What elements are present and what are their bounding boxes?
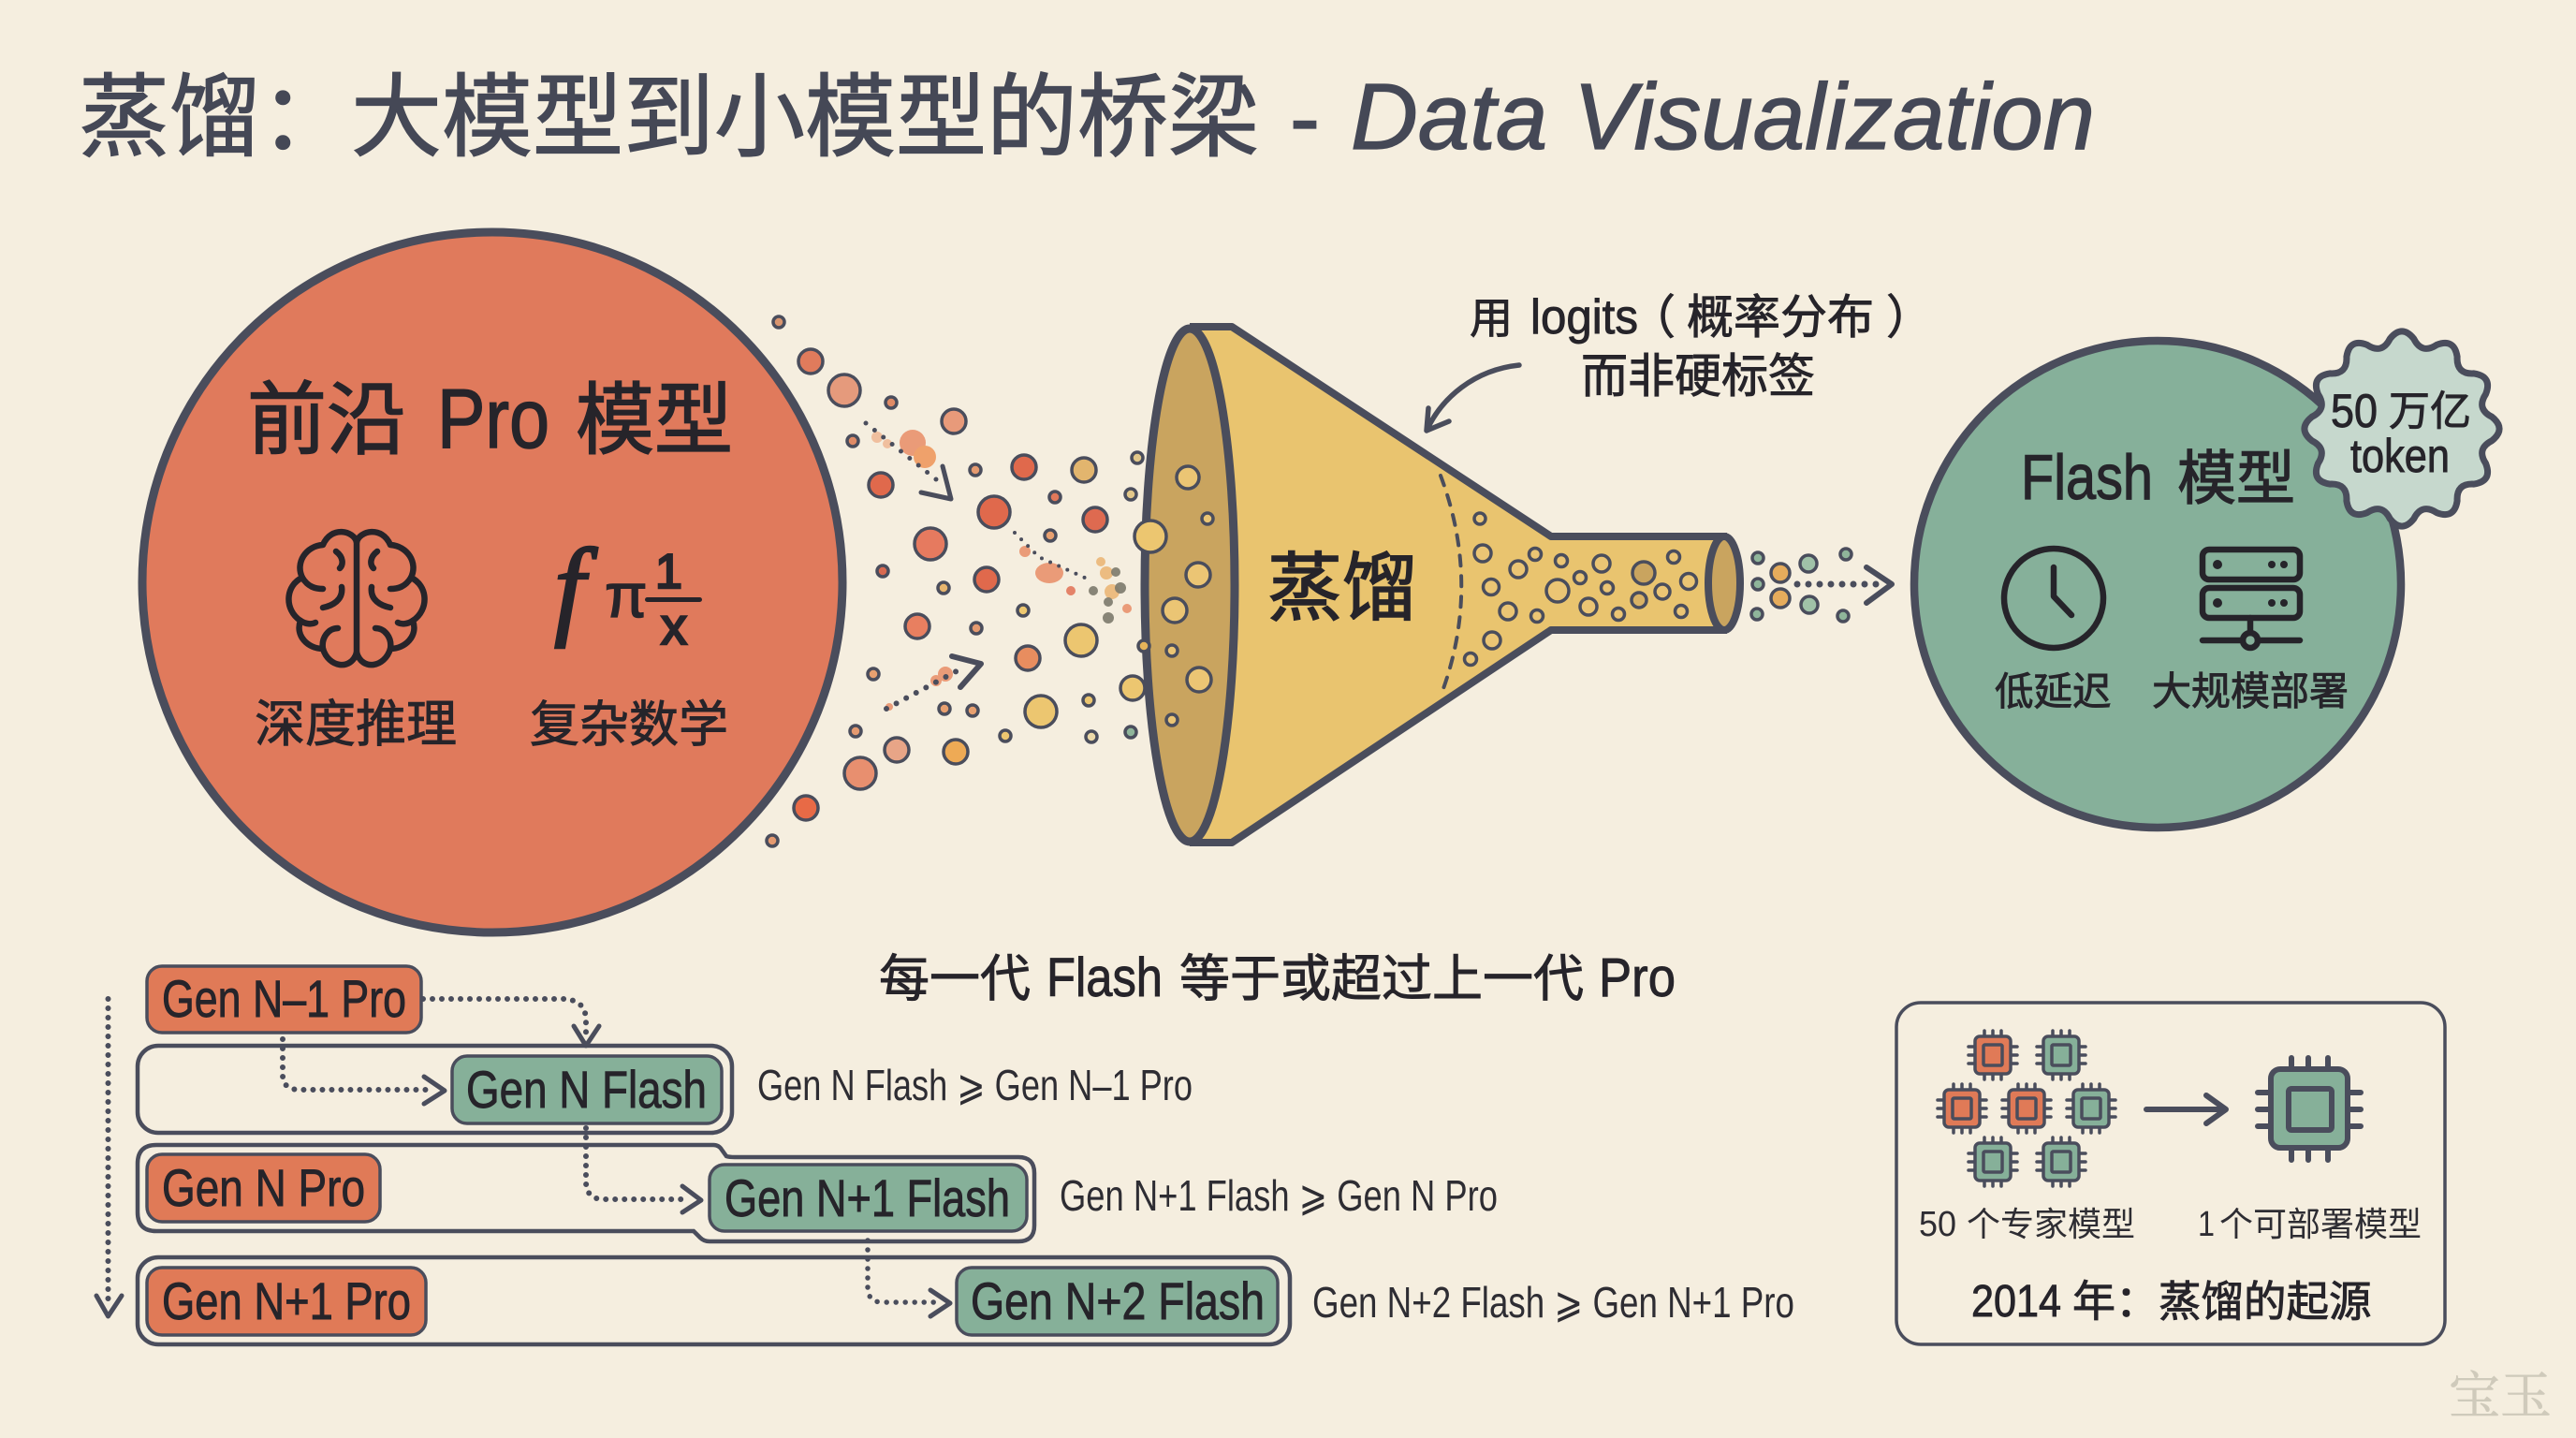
icon: math formula: x bbox=[661, 596, 687, 655]
frame: row Gen N+1 bbox=[138, 1145, 1034, 1241]
callout: logits annotation bbox=[1470, 280, 1933, 406]
label: large scale deployment: 大规模部署 bbox=[2152, 660, 2349, 717]
arrow: Gen N-1 Pro to Gen N Flash top bbox=[423, 999, 599, 1046]
icon: clock bbox=[2004, 549, 2103, 648]
heading: frontier Pro model: 前沿 bbox=[247, 356, 406, 471]
particles leaving the funnel bbox=[1751, 549, 1852, 622]
arrow: ensemble to single bbox=[2146, 1095, 2226, 1123]
badge: 50 trillion tokens: token bbox=[2350, 430, 2450, 482]
heading: 2014 origin bbox=[1971, 1268, 2372, 1329]
text: relation 3: Gen N+2 Flash ⩾ Gen N+1 Pro bbox=[1312, 1278, 1794, 1327]
smudges along particle arrows bbox=[871, 430, 1132, 711]
icon: ensemble of chips bbox=[1938, 1031, 2115, 1186]
frame: row Gen N bbox=[138, 1046, 732, 1133]
callout: logits annotation: 用 bbox=[1470, 285, 1513, 346]
heading: every generation: Flash bbox=[1046, 947, 1163, 1008]
title bbox=[79, 43, 2095, 175]
node: Gen N+1 Flash: Gen N+1 Flash bbox=[724, 1168, 1010, 1227]
node: Gen N+2 Flash: Gen N+2 Flash bbox=[971, 1271, 1265, 1330]
arrow: upper particle stream bbox=[866, 423, 951, 499]
particles flowing into the funnel bbox=[767, 316, 1145, 846]
arrow: Gen N Flash to Gen N+1 Flash bbox=[586, 1128, 701, 1212]
label: 1 deployable model: 1 bbox=[2198, 1205, 2215, 1244]
funnel mouth particles bbox=[1134, 466, 1213, 726]
node: Gen N Pro: Gen N Pro bbox=[162, 1158, 365, 1217]
heading: frontier Pro model: 模型 bbox=[576, 358, 733, 471]
heading: every generation bbox=[879, 937, 1676, 1011]
arrow: Gen N-1 Pro to Gen N Flash side bbox=[283, 1039, 445, 1104]
heading: 2014 origin: 2014 bbox=[1971, 1277, 2061, 1327]
title: Data Visualization bbox=[1351, 65, 2095, 169]
arrow: middle particle stream bbox=[1015, 533, 1087, 579]
label: 1 deployable model: 个可部署模型 bbox=[2219, 1197, 2422, 1246]
funnel neck particles bbox=[1464, 513, 1696, 665]
icon: single chip bbox=[2258, 1058, 2361, 1160]
callout: logits annotation: ） bbox=[1886, 280, 1933, 347]
heading: every generation: 等于或超过上一代 bbox=[1179, 937, 1584, 1011]
badge: 50 trillion tokens bbox=[2305, 331, 2499, 526]
callout: logits annotation: logits bbox=[1530, 290, 1638, 345]
funnel: distillation bbox=[1134, 327, 1740, 843]
arrow: into Flash model bbox=[1797, 567, 1892, 603]
badge: 50 trillion tokens: 万亿 bbox=[2389, 377, 2471, 437]
callout: logits annotation: 而非硬标签 bbox=[1581, 339, 1815, 406]
node: Gen N-1 Pro: Gen N–1 Pro bbox=[162, 969, 406, 1028]
arrow: callout to funnel bbox=[1427, 365, 1519, 431]
heading: every generation: 每一代 bbox=[879, 937, 1031, 1011]
label: complex math: 复杂数学 bbox=[530, 685, 728, 756]
icon: brain bbox=[288, 532, 425, 665]
heading: 2014 origin: 年： bbox=[2072, 1268, 2159, 1329]
heading: frontier Pro model: Pro bbox=[437, 373, 549, 466]
heading: Flash model bbox=[2021, 432, 2295, 517]
heading: Flash model: Flash bbox=[2021, 442, 2153, 513]
panel: Flash model circle bbox=[1914, 341, 2401, 828]
funnel mouth bbox=[1145, 329, 1235, 842]
icon: server bbox=[2203, 550, 2300, 648]
heading: Flash model: 模型 bbox=[2177, 432, 2295, 517]
arrow: time axis bbox=[96, 999, 122, 1316]
label: 50 expert models: 个专家模型 bbox=[1967, 1197, 2135, 1246]
icon: math formula: 1 bbox=[655, 545, 682, 599]
heading: 2014 origin: 蒸馏的起源 bbox=[2159, 1268, 2372, 1329]
text: relation 1: Gen N Flash ⩾ Gen N–1 Pro bbox=[757, 1061, 1193, 1109]
node: Gen N Flash: Gen N Flash bbox=[466, 1060, 707, 1119]
callout: logits annotation: 概率分布 bbox=[1687, 280, 1874, 347]
icon: math formula: π bbox=[605, 561, 648, 630]
icon: math formula: f bbox=[554, 526, 598, 649]
arrow: lower particle stream bbox=[886, 656, 981, 709]
label: 50 expert models: 50 bbox=[1919, 1205, 1956, 1244]
label: low latency: 低延迟 bbox=[1995, 660, 2112, 716]
flow chart: generations bbox=[96, 966, 1794, 1344]
funnel dashed divider bbox=[1441, 476, 1461, 694]
arrow: Gen N+1 Flash to Gen N+2 Flash bbox=[868, 1240, 950, 1316]
node: Gen N+1 Pro: Gen N+1 Pro bbox=[162, 1271, 411, 1330]
funnel label: 蒸馏 bbox=[1267, 528, 1417, 637]
badge: 50 trillion tokens: 50 bbox=[2331, 385, 2378, 437]
frame: row Gen N+2 bbox=[138, 1257, 1290, 1344]
text: relation 2: Gen N+1 Flash ⩾ Gen N Pro bbox=[1060, 1171, 1498, 1220]
heading: frontier Pro model bbox=[247, 356, 733, 471]
title: 蒸馏：大模型到小模型的桥梁 bbox=[79, 43, 1259, 175]
title: - bbox=[1290, 66, 1320, 169]
panel: origin of distillation 2014 bbox=[1896, 1003, 2445, 1344]
panel: frontier Pro model circle bbox=[142, 232, 842, 932]
callout: logits annotation: （ bbox=[1629, 280, 1676, 347]
funnel neck opening bbox=[1708, 536, 1740, 630]
label: deep reasoning: 深度推理 bbox=[255, 682, 457, 756]
watermark: 宝玉 bbox=[2449, 1355, 2552, 1429]
icon: math formula bbox=[554, 526, 702, 655]
funnel body bbox=[1190, 327, 1727, 843]
heading: every generation: Pro bbox=[1599, 947, 1676, 1008]
